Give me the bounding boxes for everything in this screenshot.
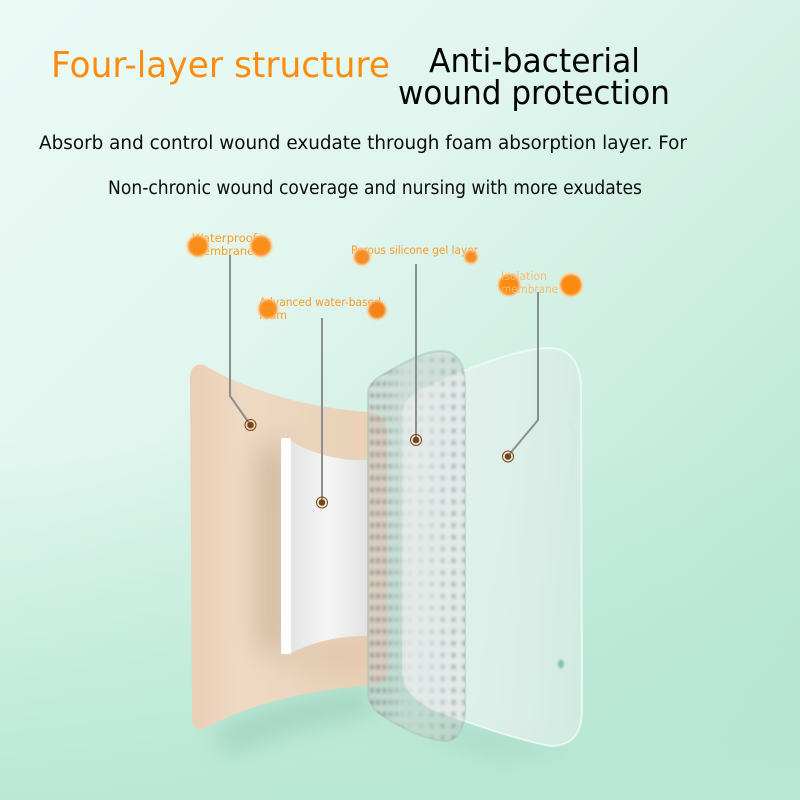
layer: isolation membrane (clear film) <box>403 348 582 746</box>
layer: waterproof membrane (skin tone) <box>190 365 388 730</box>
callout: advanced water-based foam <box>258 295 386 508</box>
callout: waterproof membrane <box>187 231 272 430</box>
description text: Non-chronic wound coverage and nursing with more exudates <box>108 178 642 199</box>
layer: advanced water-based foam <box>281 438 367 654</box>
heading: anti-bacterial wound protection: Anti-bacterial <box>429 41 640 80</box>
heading: anti-bacterial wound protection <box>398 41 670 112</box>
title: four-layer structure: Four-layer structure <box>51 45 390 86</box>
callout: porous silicone gel layer <box>351 243 478 446</box>
callout: isolation membrane: Isolation <box>501 269 547 283</box>
dressing illustration <box>190 348 582 760</box>
callout: isolation membrane <box>498 269 582 462</box>
callout: advanced water-based foam: foam <box>259 308 287 322</box>
callout: waterproof membrane: membrane <box>192 244 254 258</box>
callout: advanced water-based foam: Advanced water-based <box>259 295 381 309</box>
description text: Absorb and control wound exudate through foam absorption layer. For <box>39 133 687 154</box>
layer: porous silicone gel <box>368 350 470 742</box>
heading: anti-bacterial wound protection: wound protection <box>398 73 670 112</box>
callout: isolation membrane: membrane <box>501 282 558 296</box>
callout: waterproof membrane: Waterproof <box>192 231 258 245</box>
callout: porous silicone gel layer: Porous silicone gel layer <box>351 243 478 257</box>
drop shadow under layers <box>215 686 575 760</box>
description text <box>39 133 687 199</box>
